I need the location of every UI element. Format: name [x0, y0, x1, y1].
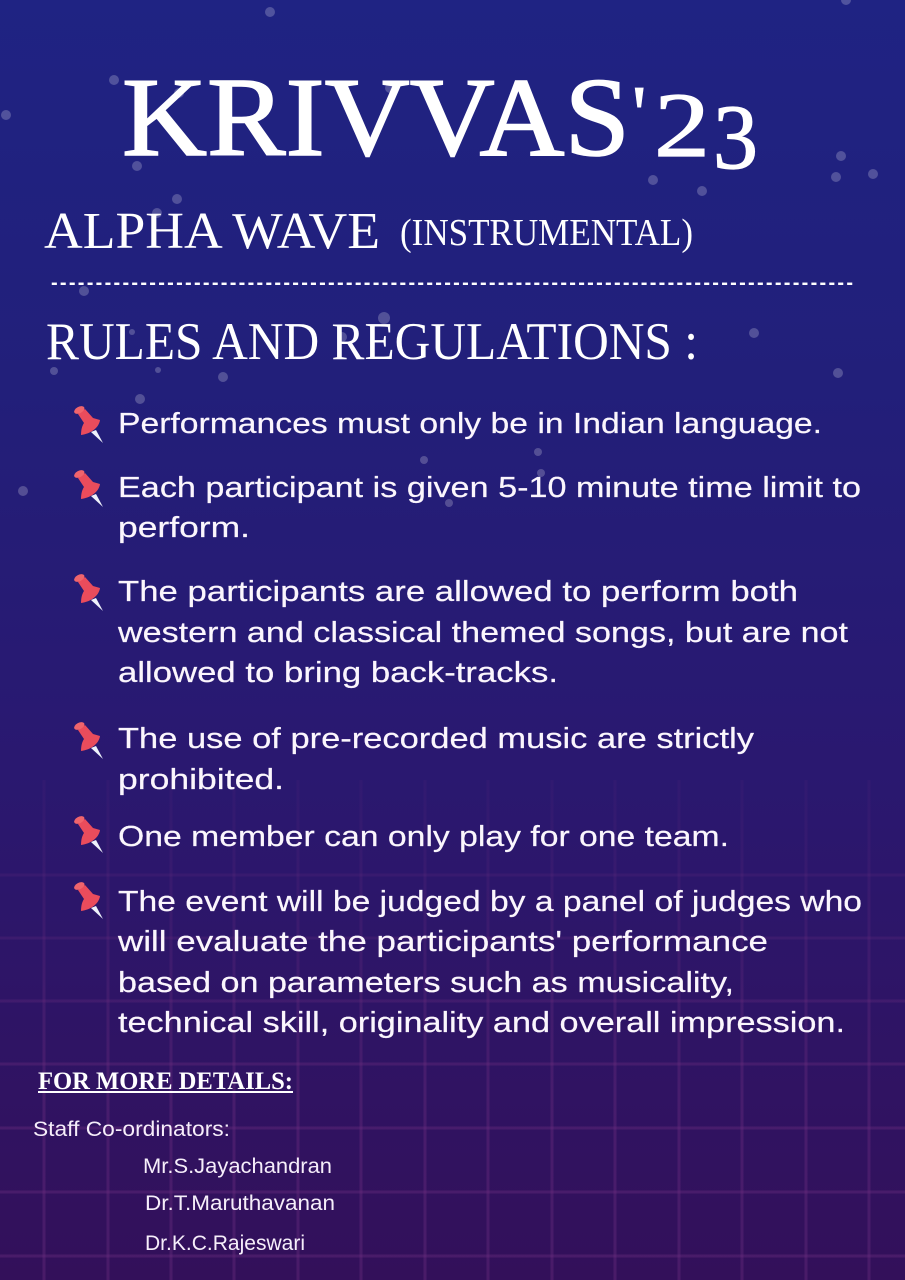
- decorative dots: [1, 0, 878, 507]
- icon: push pin: [73, 405, 103, 443]
- rule 6: will evaluate the participants' performance: [117, 926, 768, 958]
- footer heading: FOR MORE DETAILS:: [38, 1068, 293, 1095]
- dashed divider: ------------------------------------------------------------------------------------------: [51, 272, 853, 294]
- icon: push pin: [73, 469, 103, 507]
- event subtitle: [44, 203, 693, 260]
- rule 6: technical skill, originality and overall impression.: [118, 1007, 845, 1039]
- event subtitle: (INSTRUMENTAL): [400, 212, 693, 254]
- icon: push pin: [73, 573, 103, 611]
- rule 6: The event will be judged by a panel of judges who: [118, 886, 862, 918]
- icon: push pin: [73, 815, 103, 853]
- event subtitle: ALPHA WAVE: [44, 203, 380, 260]
- rule 5: One member can only play for one team.: [118, 821, 729, 853]
- staff coordinators: Dr.T.Maruthavanan: [145, 1192, 335, 1215]
- title: 3: [713, 86, 758, 188]
- rule 6: based on parameters such as musicality,: [118, 967, 734, 999]
- staff coordinators: Mr.S.Jayachandran: [143, 1155, 332, 1178]
- icon: push pin: [73, 721, 103, 759]
- rule 3: western and classical themed songs, but are not: [117, 617, 848, 649]
- staff coordinators: Dr.K.C.Rajeswari: [145, 1232, 305, 1255]
- rule 2: Each participant is given 5-10 minute time limit to: [118, 472, 861, 504]
- rule 1: [73, 405, 822, 443]
- rule 4: [73, 721, 755, 796]
- rule 4: The use of pre-recorded music are strictly: [118, 723, 755, 755]
- rule 2: [73, 469, 861, 544]
- title: KRIVVAS: [122, 56, 630, 180]
- rules heading: RULES AND REGULATIONS :: [46, 313, 698, 371]
- staff coordinators: [33, 1118, 335, 1255]
- rule 4: prohibited.: [118, 764, 284, 796]
- rule 3: [73, 573, 848, 689]
- rule 5: [73, 815, 729, 853]
- icon: push pin: [73, 881, 103, 919]
- rule 3: The participants are allowed to perform both: [118, 576, 798, 608]
- rule 2: perform.: [118, 512, 250, 544]
- rule 1: Performances must only be in Indian language.: [118, 408, 822, 440]
- title: 2: [654, 74, 710, 176]
- rule 6: [73, 881, 862, 1039]
- title: ': [632, 71, 646, 159]
- staff coordinators: Staff Co-ordinators:: [33, 1118, 230, 1141]
- rule 3: allowed to bring back-tracks.: [118, 657, 558, 689]
- decorative grid: [0, 780, 905, 1280]
